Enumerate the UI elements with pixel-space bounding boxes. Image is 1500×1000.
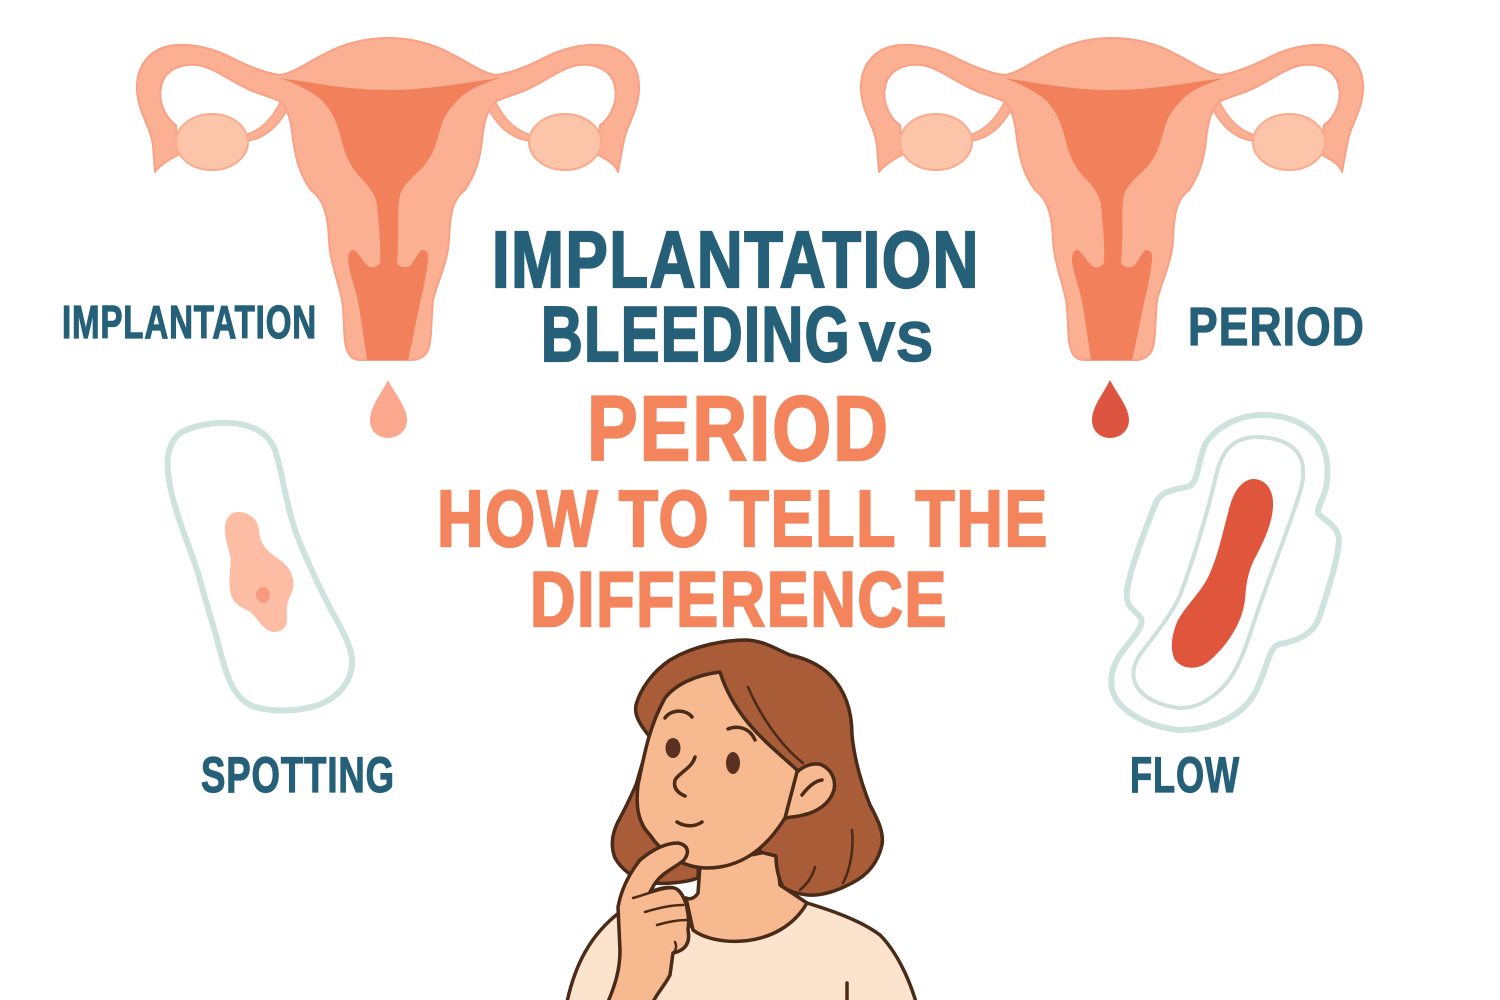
icon: dark red blood drop <box>1092 380 1129 438</box>
label: period: PERIOD <box>1188 297 1365 357</box>
flow stain <box>1172 479 1273 668</box>
label: flow: FLOW <box>1130 747 1240 803</box>
hair strand <box>748 687 803 763</box>
spot stain <box>225 512 294 632</box>
right eye <box>726 752 740 774</box>
title line: how to tell the: HOW TO TELL THE <box>437 474 1049 563</box>
right eyebrow <box>728 727 755 740</box>
hand <box>608 843 689 1000</box>
face <box>637 672 800 868</box>
left eye <box>666 738 680 758</box>
shirt fold <box>845 983 849 1000</box>
label: implantation: IMPLANTATION <box>62 296 317 348</box>
shirt <box>567 903 916 1000</box>
hair lines right <box>800 830 853 890</box>
title line: difference: DIFFERENCE <box>530 555 948 643</box>
icon: flow pad <box>1111 415 1339 730</box>
icon: light pink blood drop <box>370 380 407 438</box>
icon: uterus, implantation <box>137 38 639 360</box>
title line: implantation: IMPLANTATION <box>492 215 980 304</box>
icon: uterus, period <box>861 38 1363 360</box>
title word: vs: VS <box>859 310 934 373</box>
label: spotting: SPOTTING <box>201 747 395 803</box>
nose <box>675 757 695 796</box>
ear inner <box>802 780 822 795</box>
finger lines <box>633 888 687 953</box>
hair <box>612 640 882 895</box>
icon: spotting pad <box>168 423 352 710</box>
ear <box>785 764 834 818</box>
neck <box>686 850 807 941</box>
title <box>437 215 1049 643</box>
title line: bleeding: BLEEDING <box>541 290 851 378</box>
illustration: thinking woman <box>567 640 916 1000</box>
spot centre <box>256 587 270 603</box>
title line: period: PERIOD <box>587 378 890 480</box>
left eyebrow <box>665 711 692 718</box>
mouth <box>677 822 702 826</box>
